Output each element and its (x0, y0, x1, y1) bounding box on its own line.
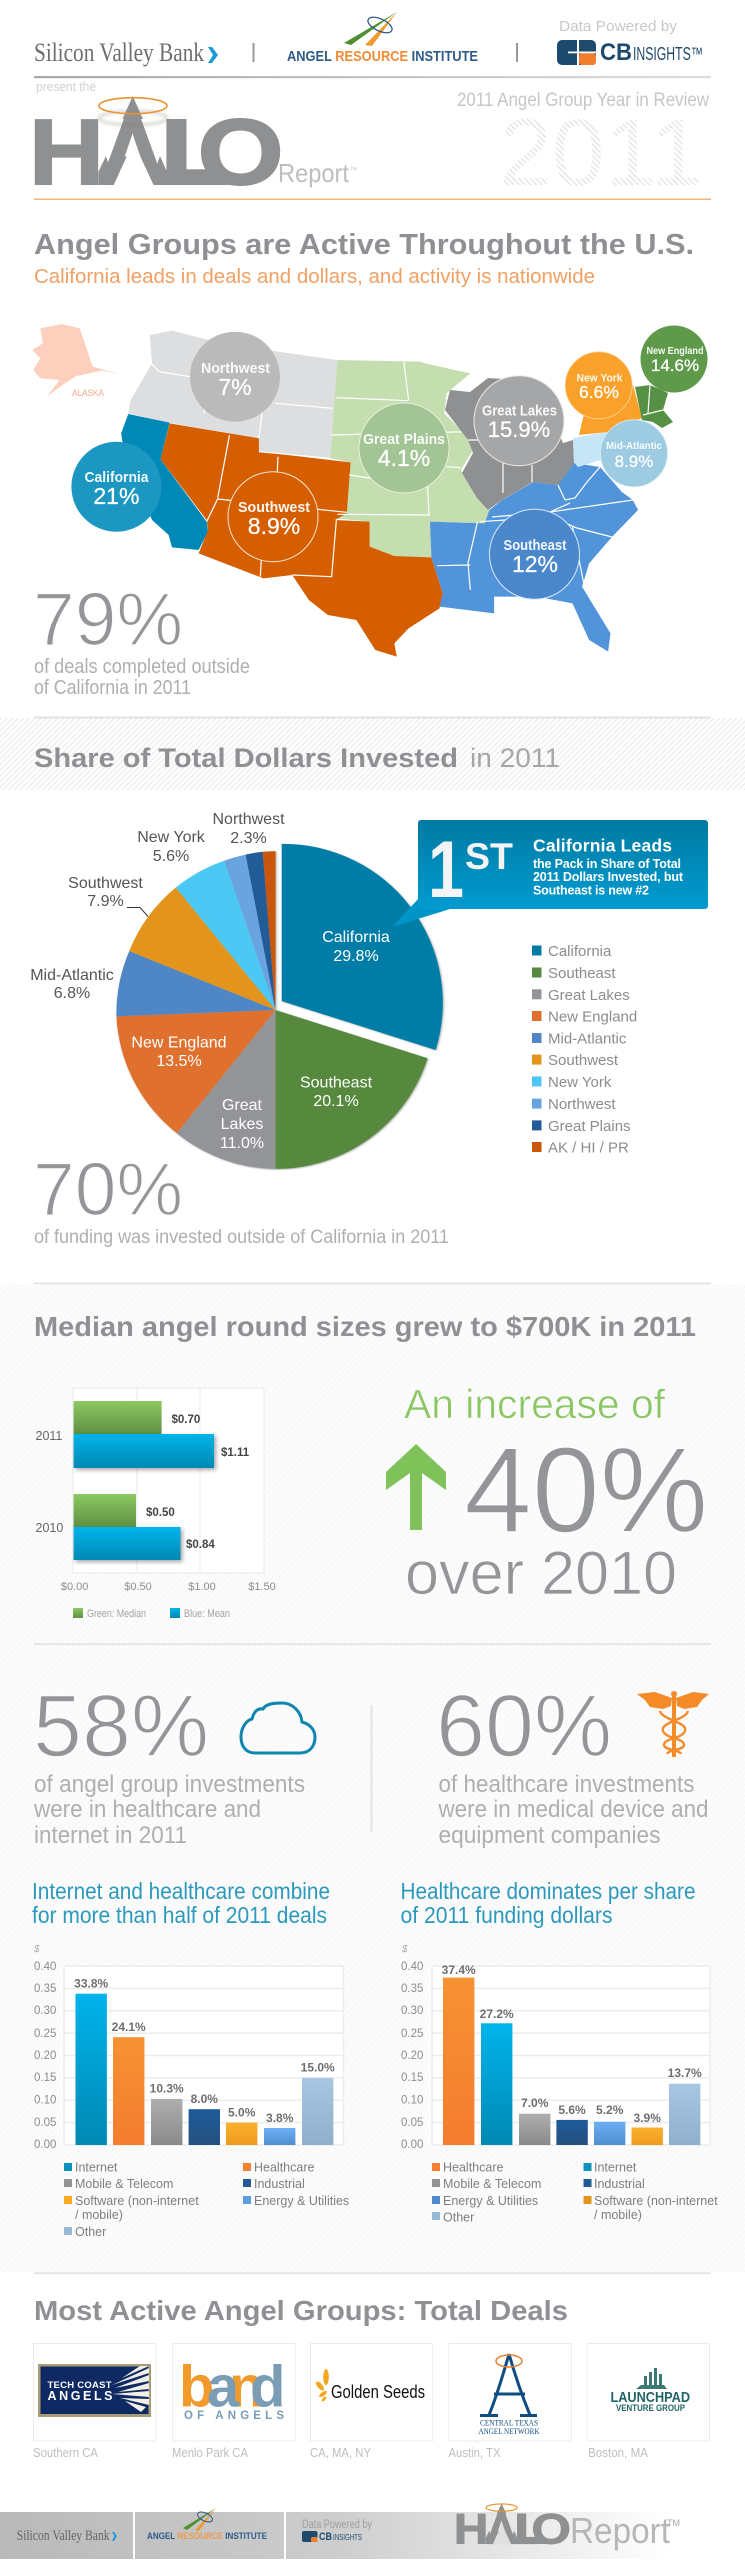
stat: 58% (33, 1676, 315, 1849)
axis values: 0.15 (401, 2072, 423, 2084)
axis values: 0.05 (34, 2117, 56, 2129)
section band: share of dollars: Share of Total Dollars Invested (34, 743, 458, 773)
footer (0, 2503, 745, 2560)
region: California (121, 414, 208, 550)
stat: increase of 40%: An increase of (404, 1381, 666, 1427)
chart legend: Green: Median (87, 1608, 146, 1620)
heading: deals chart (32, 1878, 330, 1928)
callout: California leads (392, 820, 708, 927)
stat: 58%: internet in 2011 (34, 1822, 187, 1849)
pie legend: Northwest (548, 1096, 616, 1113)
axis values: 0.20 (34, 2050, 56, 2062)
axis labels: $1.00 (188, 1581, 216, 1593)
bubble: Southeast: 12% (512, 551, 558, 577)
pie legend: Great Plains (548, 1118, 631, 1135)
group card: Tech Coast Angels: TECH COAST (48, 2380, 112, 2391)
halo wordmark: A (99, 100, 166, 204)
chart legend: Other (75, 2225, 106, 2239)
slice: Southwest (129, 887, 276, 1010)
bar chart: round sizes: 2010 (36, 1521, 63, 1535)
bars: 5.0% (228, 2106, 256, 2120)
chart legend: Software (non-internet (594, 2194, 718, 2208)
chart legend (64, 2160, 349, 2239)
bubble: New England: 14.6% (651, 356, 699, 375)
region: Mid-Atlantic (573, 420, 640, 467)
group card: Central Texas Angel Network: Austin, TX (448, 2446, 501, 2460)
bars: 5.2% (596, 2103, 624, 2117)
pie labels: Great (222, 1097, 263, 1114)
region: Northwest (128, 331, 337, 458)
heading: deals chart: for more than half of 2011 deals (32, 1902, 327, 1928)
callout: California leads: California Leads (533, 836, 672, 856)
pie labels: 7.9% (87, 893, 124, 910)
pie legend (532, 943, 637, 1156)
logo: Angel Resource Institute (287, 12, 478, 65)
bubble: New York (565, 352, 632, 419)
footer logo: Halo Report: TM (667, 2518, 680, 2528)
pie labels: Lakes (221, 1116, 263, 1133)
bars: 7.0% (521, 2096, 549, 2110)
chart legend (432, 2160, 718, 2224)
pie labels: New York (137, 829, 206, 846)
footer logo: CB Insights: INSIGHTS (333, 2533, 362, 2542)
bubble: California: California (84, 469, 149, 486)
group card: Tech Coast Angels: Southern CA (33, 2446, 99, 2460)
group card: Launchpad Venture Group: LAUNCHPAD (610, 2389, 690, 2406)
bars: 15.0% (301, 2060, 335, 2074)
bars 2011: $0.70 (172, 1414, 200, 1426)
section band: share of dollars: in 2011 (470, 743, 560, 773)
title block: Halo Report (29, 80, 709, 206)
pie legend: New York (548, 1074, 612, 1091)
chart legend: Industrial (594, 2177, 645, 2191)
bubble: Great Plains: 4.1% (378, 445, 430, 471)
region: Southeast (430, 463, 638, 652)
axis values: 0.35 (34, 1983, 56, 1995)
heading: median round sizes: Median angel round sizes grew to $700K in 2011 (34, 1311, 696, 1342)
bars: 3.9% (634, 2111, 661, 2125)
region: Southwest (161, 423, 443, 657)
group card: Band of Angels: d (250, 2354, 285, 2420)
axis labels: $0.50 (124, 1581, 152, 1593)
slice: California (282, 844, 443, 1050)
bars: 8.0% (191, 2092, 218, 2106)
US map (32, 324, 707, 657)
chart legend: / mobile) (75, 2208, 123, 2222)
footer logo: Halo Report: A (486, 2506, 517, 2554)
axis values: 0.00 (34, 2139, 56, 2151)
halo wordmark: L (160, 100, 234, 204)
slice: New York (176, 861, 276, 1010)
slice: Northwest (224, 855, 276, 1010)
axis values (34, 1961, 56, 2151)
stat: 60%: were in medical device and (438, 1796, 708, 1823)
logo: Silicon Valley Bank: Silicon Valley Bank (34, 38, 204, 67)
title block: Halo Report: 2011 Angel Group Year in Review (457, 90, 709, 111)
bubble: Mid-Atlantic (600, 420, 668, 487)
bubble: Southwest (228, 472, 318, 562)
group card: Central Texas Angel Network (448, 2344, 572, 2460)
logo: Angel Resource Institute: ANGEL RESOURCE INSTITUTE (287, 49, 478, 65)
logo: CB Insights (557, 18, 703, 66)
group card: Golden Seeds: CA, MA, NY (310, 2446, 372, 2460)
group card: Central Texas Angel Network: ANGEL NETWORK (478, 2426, 540, 2436)
halo wordmark (29, 96, 284, 204)
axis values: 0.30 (34, 2005, 56, 2017)
stat: increase of 40%: 40% (464, 1422, 708, 1558)
group card: Golden Seeds (310, 2344, 432, 2460)
bubble: Great Plains (359, 403, 449, 493)
region: New England (635, 385, 673, 428)
axis labels (61, 1581, 276, 1593)
stat: 70%: of funding was invested outside of California in 2011 (34, 1227, 449, 1248)
pie legend: Great Lakes (548, 987, 630, 1004)
bubble: New England: New England (646, 345, 704, 357)
axis values: 0.25 (401, 2028, 423, 2040)
pie labels: Southwest (68, 875, 143, 892)
group card: Band of Angels: n (229, 2354, 264, 2420)
heading: most active groups: Most Active Angel Groups: Total Deals (34, 2295, 568, 2326)
logo: CB Insights: CB (600, 39, 632, 66)
bars: 33.8% (74, 1976, 109, 1990)
slice: Great Plains (246, 852, 276, 1010)
slice: Great Lakes (177, 1010, 276, 1169)
icon: caduceus (637, 1691, 709, 1757)
pie labels: 29.8% (333, 948, 379, 965)
chart legend: Other (443, 2210, 474, 2224)
axis values: 0.20 (401, 2050, 423, 2062)
pie labels (30, 811, 390, 1152)
bar chart: share of dollars (401, 1944, 718, 2224)
region: New York (579, 385, 642, 435)
slice: Mid-Atlantic (116, 951, 276, 1016)
slice: Southeast (276, 1010, 428, 1169)
bars: 27.2% (480, 2007, 514, 2021)
bubble: California (71, 442, 161, 532)
stat: 60% (436, 1676, 709, 1849)
pie labels: 5.6% (153, 848, 189, 865)
chart legend: Mobile & Telecom (443, 2177, 541, 2191)
bar chart: round sizes (36, 1388, 276, 1620)
pie labels: Southeast (300, 1074, 373, 1092)
axis values: 0.00 (401, 2139, 423, 2151)
section band: share of dollars (0, 716, 745, 790)
stat: 58%: of angel group investments (34, 1771, 305, 1798)
chart legend: Energy & Utilities (254, 2194, 349, 2208)
bubble: Southeast (490, 509, 580, 599)
axis values: 0.25 (34, 2028, 56, 2040)
axis values: 0.10 (34, 2094, 56, 2106)
axis values (401, 1961, 423, 2151)
stat: 79%: 79% (33, 577, 183, 661)
heading: dollars chart: of 2011 funding dollars (400, 1902, 612, 1928)
callout: California leads: ST (465, 836, 513, 877)
pie slices (116, 844, 443, 1169)
logo: CB Insights: INSIGHTS™ (633, 44, 703, 64)
eastern map regions (445, 378, 673, 537)
stat: 58%: 58% (33, 1676, 209, 1775)
chart legend: Software (non-internet (75, 2194, 199, 2208)
bar chart: share of deals: $ (33, 1944, 40, 1955)
axis values: 0.40 (401, 1961, 423, 1973)
group card: Band of Angels: a (207, 2354, 240, 2420)
bubble: Southwest: Southwest (238, 499, 310, 516)
group card: Launchpad Venture Group: Boston, MA (588, 2446, 649, 2460)
pie legend: AK / HI / PR (548, 1140, 629, 1156)
bubble: New York: New York (576, 373, 623, 385)
footer logo: Angel Resource Institute: ANGEL RESOURCE INSTITUTE (147, 2531, 267, 2541)
axis labels: $0.00 (61, 1581, 88, 1593)
bubble: Northwest: 7% (218, 374, 252, 400)
pie labels: 6.8% (54, 985, 90, 1002)
chart legend: Mobile & Telecom (75, 2177, 173, 2191)
bubble: Great Lakes (474, 376, 564, 466)
group card: Band of Angels: OF ANGELS (184, 2410, 284, 2422)
footer logo: Angel Resource Institute (147, 2508, 267, 2541)
stat: 70% (33, 1147, 449, 1248)
axis values: 0.10 (401, 2094, 423, 2106)
chart legend: Internet (75, 2160, 118, 2174)
heading: deals chart: Internet and healthcare combine (32, 1878, 330, 1904)
bubble: Great Lakes: Great Lakes (482, 403, 557, 420)
axis values: 0.15 (34, 2072, 56, 2084)
pie legend: Southeast (548, 965, 616, 982)
hatched background lower section (0, 1284, 745, 2272)
bubble: Northwest: Northwest (201, 360, 270, 377)
region: Alaska (32, 324, 119, 396)
bars: 5.6% (558, 2103, 586, 2117)
bars (442, 1963, 702, 2145)
pie legend: Mid-Atlantic (548, 1030, 627, 1048)
slice: AK HI PR (263, 851, 276, 1010)
footer logo: Halo Report (454, 2503, 680, 2554)
group card: Tech Coast Angels (33, 2344, 156, 2460)
axis values: 0.05 (401, 2117, 423, 2129)
stat: 60%: of healthcare investments (438, 1771, 694, 1798)
pie labels: New England (131, 1034, 227, 1052)
axis values: 0.30 (401, 2005, 423, 2017)
pie legend: California (548, 943, 612, 960)
chart legend: Internet (594, 2160, 637, 2174)
title block: Halo Report: present the (36, 80, 96, 94)
heading: dollars chart (400, 1878, 696, 1928)
footer logo: CB Insights: Data Powered by (302, 2519, 372, 2531)
title block: Halo Report: ™ (350, 167, 357, 174)
pie legend: Southwest (548, 1052, 619, 1069)
pie labels: 2.3% (230, 830, 267, 847)
stat: 60%: equipment companies (438, 1822, 660, 1849)
bubble: Southeast: Southeast (504, 537, 566, 554)
group card: Launchpad Venture Group: VENTURE GROUP (616, 2403, 685, 2413)
stat: increase of 40%: over 2010 (405, 1539, 677, 1607)
chart legend (73, 1608, 230, 1620)
group card: Band of Angels: Menlo Park CA (172, 2446, 249, 2460)
heading: dollars chart: Healthcare dominates per share (400, 1878, 696, 1904)
pie labels: 11.0% (220, 1135, 264, 1152)
group card: Tech Coast Angels: ANGELS (48, 2389, 112, 2403)
bars 2011: $1.11 (221, 1447, 250, 1459)
chart legend: / mobile) (594, 2208, 642, 2222)
bars 2010 (74, 1494, 215, 1560)
halo wordmark: O (198, 100, 284, 204)
stat: increase of 40% (386, 1381, 708, 1607)
label: Alaska: ALASKA (72, 388, 105, 399)
heading: Angel Groups: Angel Groups are Active Throughout the U.S. (34, 229, 694, 261)
chart legend: Healthcare (254, 2160, 314, 2174)
footer logo: Halo Report: Report (570, 2510, 670, 2551)
bars: 24.1% (112, 2020, 146, 2034)
chart legend: Energy & Utilities (443, 2194, 538, 2208)
group card: Central Texas Angel Network: CENTRAL TEXAS (480, 2418, 538, 2428)
bar chart: round sizes: 2011 (36, 1429, 62, 1443)
callout: California leads: Southeast is new #2 (533, 883, 649, 897)
bubble: New England (640, 326, 708, 392)
footer logo: CB Insights: CB (319, 2531, 332, 2543)
group card: Band of Angels (172, 2344, 295, 2460)
bubble: Great Plains: Great Plains (363, 431, 445, 448)
pie labels: Mid-Atlantic (30, 967, 114, 984)
pie labels: 20.1% (313, 1093, 359, 1110)
bubble: Mid-Atlantic: Mid-Atlantic (606, 440, 662, 452)
footer logo: Halo Report: L (514, 2506, 548, 2554)
map regions (32, 324, 638, 657)
subheading: California leads in deals and dollars, and activity is nationwide (34, 265, 595, 288)
bubble: Mid-Atlantic: 8.9% (615, 452, 653, 471)
stat: 70%: 70% (33, 1147, 183, 1231)
callout: California leads: 1 (428, 825, 464, 915)
footer logo: Halo Report: H (454, 2506, 488, 2554)
axis values: 0.40 (34, 1961, 56, 1973)
pie legend: New England (548, 1008, 637, 1026)
pie labels: California (322, 929, 390, 946)
footer logo: Silicon Valley Bank: Silicon Valley Bank (17, 2528, 110, 2544)
chart legend: Blue: Mean (184, 1608, 230, 1620)
pie labels: 13.5% (156, 1053, 202, 1070)
header logos (34, 12, 703, 67)
halo wordmark: H (29, 100, 104, 204)
bars: 3.8% (266, 2111, 294, 2125)
stat: 58%: were in healthcare and (33, 1796, 261, 1823)
region: Great Plains (330, 360, 489, 557)
bubble: New York: 6.6% (579, 382, 619, 402)
chart legend: Healthcare (443, 2160, 503, 2174)
axis values: 0.35 (401, 1983, 423, 1995)
group card: Launchpad Venture Group (587, 2344, 710, 2460)
bars 2010: $0.84 (186, 1539, 215, 1551)
axis labels: $1.50 (248, 1581, 276, 1593)
stat: 79%: of deals completed outside (34, 655, 250, 678)
bar chart: share of dollars: $ (401, 1944, 408, 1955)
icon: up arrow (386, 1444, 446, 1530)
group card: Golden Seeds: Golden Seeds (331, 2382, 425, 2402)
slice: New England (116, 1010, 276, 1133)
stat: 79% (33, 577, 250, 699)
pie labels: Northwest (212, 811, 285, 828)
bubble: California: 21% (93, 483, 139, 509)
stat: 60%: 60% (436, 1676, 612, 1775)
bars 2010: $0.50 (146, 1507, 175, 1519)
chart legend: Industrial (254, 2177, 305, 2191)
footer logo: CB Insights (302, 2519, 372, 2543)
group card: Band of Angels: b (179, 2354, 214, 2420)
bar chart: share of deals (33, 1944, 349, 2239)
stat: 79%: of California in 2011 (34, 676, 191, 699)
bars: 37.4% (442, 1963, 476, 1977)
callout: California leads: 2011 Dollars Invested, but (533, 870, 684, 884)
bubble: Great Lakes: 15.9% (488, 417, 550, 442)
region: Great Lakes (445, 378, 574, 510)
logo: CB Insights: Data Powered by (559, 18, 677, 35)
title block: Halo Report: Report (278, 158, 350, 188)
bars: 10.3% (150, 2082, 184, 2096)
icon: cloud (241, 1703, 315, 1753)
bubble: Northwest (190, 332, 280, 422)
pie chart (30, 811, 443, 1169)
footer logo: Halo Report: O (531, 2506, 571, 2554)
bubble: Southwest: 8.9% (248, 513, 300, 539)
bars (74, 1976, 335, 2145)
bars: 13.7% (668, 2066, 702, 2080)
bars 2011 (74, 1401, 250, 1468)
title block: Halo Report: 2011 (499, 100, 703, 206)
callout: California leads: the Pack in Share of Total (533, 857, 681, 871)
